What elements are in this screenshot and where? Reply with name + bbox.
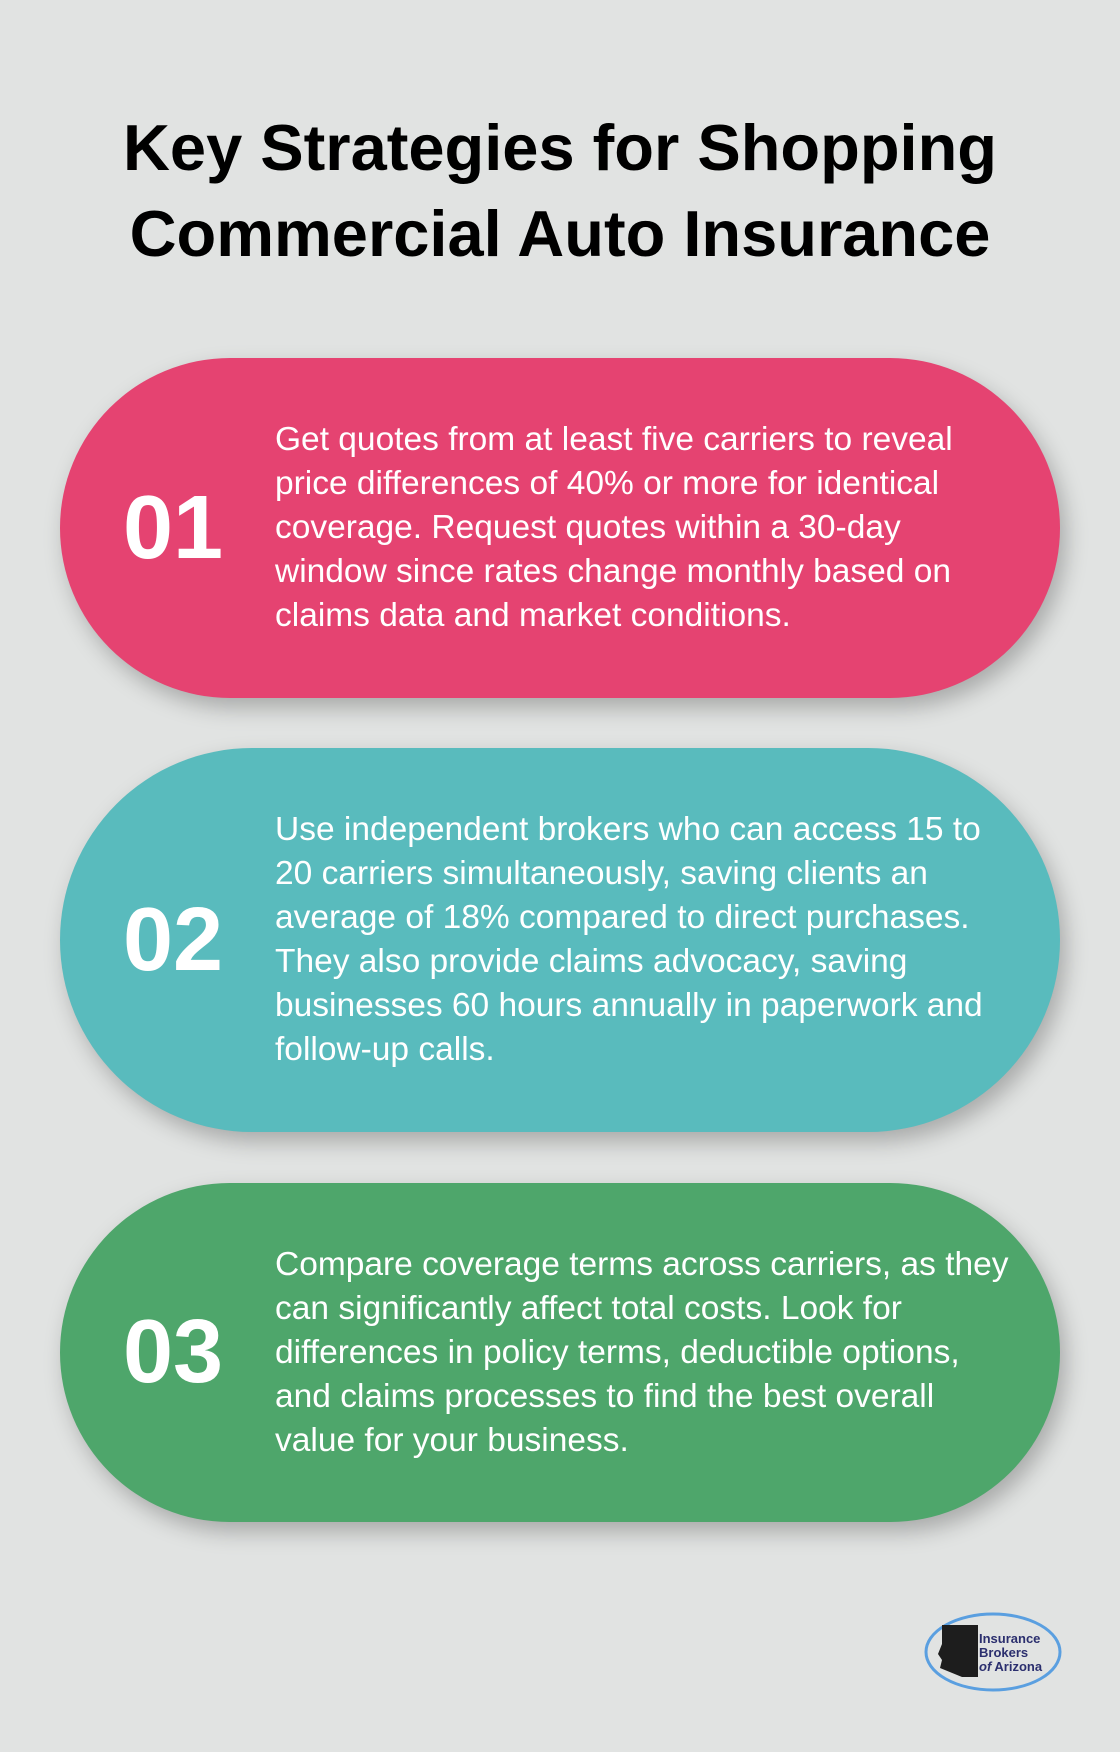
text 01: price differences of 40% or more for identical bbox=[275, 465, 939, 502]
text 03: can significantly affect total costs. Look for bbox=[275, 1290, 902, 1326]
logo: Insurance bbox=[979, 1631, 1040, 1646]
number 01: 01 bbox=[123, 478, 223, 578]
text 02 bbox=[275, 811, 983, 1068]
number 02: 02 bbox=[123, 890, 223, 990]
panel: 01 bbox=[60, 358, 1060, 698]
number 03: 03 bbox=[123, 1302, 223, 1402]
logo: of Arizona bbox=[979, 1659, 1043, 1674]
logo: Brokers bbox=[979, 1645, 1028, 1660]
text 03: and claims processes to find the best overall bbox=[275, 1378, 934, 1414]
text 03: differences in policy terms, deductible options, bbox=[275, 1334, 960, 1370]
text 01: Get quotes from at least five carriers to reveal bbox=[275, 421, 953, 458]
text 02: follow-up calls. bbox=[275, 1031, 495, 1068]
text 02: businesses 60 hours annually in paperwork and bbox=[275, 987, 983, 1024]
text 03 bbox=[275, 1246, 1009, 1458]
text 01 bbox=[275, 421, 953, 634]
title bbox=[123, 111, 997, 270]
text 01: coverage. Request quotes within a 30-day bbox=[275, 509, 901, 546]
text 02: They also provide claims advocacy, saving bbox=[275, 943, 907, 980]
panel: 03 bbox=[60, 1183, 1060, 1522]
text 01: claims data and market conditions. bbox=[275, 597, 791, 634]
text 01: window since rates change monthly based on bbox=[275, 553, 951, 590]
text 03: Compare coverage terms across carriers, as they bbox=[275, 1246, 1009, 1282]
title: Commercial Auto Insurance bbox=[130, 197, 990, 270]
text 02: 20 carriers simultaneously, saving clients an bbox=[275, 855, 928, 892]
logo bbox=[924, 1612, 1062, 1692]
title: Key Strategies for Shopping bbox=[123, 111, 997, 184]
text 02: Use independent brokers who can access 15 to bbox=[275, 811, 981, 848]
panel: 02 bbox=[60, 748, 1060, 1132]
text 03: value for your business. bbox=[275, 1422, 629, 1458]
text 02: average of 18% compared to direct purchases. bbox=[275, 899, 970, 936]
